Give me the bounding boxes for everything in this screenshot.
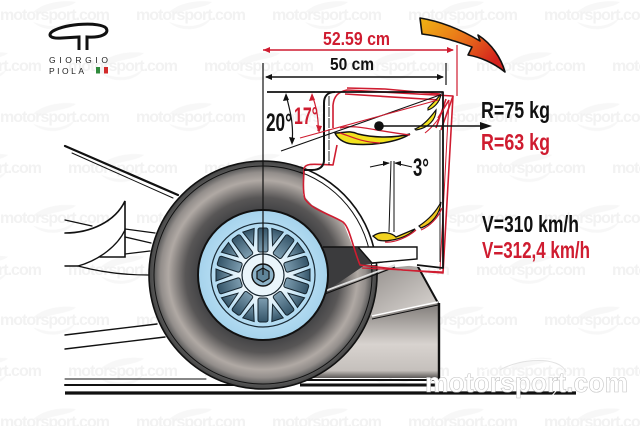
rear wing endplate interior: [303, 92, 453, 270]
car body outline left of the wheel: [65, 146, 576, 393]
beam wing wedge: [323, 247, 417, 294]
watermark pattern: motorsport.com: [340, 58, 450, 75]
watermark pattern: motorsport.com: [68, 58, 178, 75]
motorsport.com logo watermark: [425, 359, 628, 411]
angle: 20 degrees: 20°: [266, 109, 292, 137]
logo: Giorgio Piola: GIORGIO: [49, 55, 108, 65]
watermark pattern: motorsport.com: [272, 210, 382, 227]
watermark pattern: motorsport.com: [272, 7, 382, 24]
watermark pattern: motorsport.com: [340, 363, 450, 380]
watermark pattern: motorsport.com: [272, 312, 382, 329]
drag values: R=63 kg: [481, 129, 550, 155]
watermark pattern: motorsport.com: [68, 363, 178, 380]
black endplate outline (original wing): [267, 92, 443, 268]
watermark pattern: motorsport.com: [476, 262, 586, 279]
wheel rim: [198, 210, 328, 340]
watermark pattern: motorsport.com: [136, 7, 246, 24]
angle: 17 degrees: 17°: [294, 103, 318, 130]
watermark pattern: motorsport.com: [0, 312, 110, 329]
watermark pattern: motorsport.com: [204, 58, 314, 75]
watermark pattern: motorsport.com: [476, 363, 586, 380]
angle: 17 degrees: [294, 93, 438, 138]
logo: Giorgio Piola: [49, 24, 108, 76]
downforce arrow with centre of pressure: [374, 121, 492, 131]
watermark pattern: motorsport.com: [0, 210, 110, 227]
watermark pattern: motorsport.com: [204, 160, 314, 177]
drag values: [481, 97, 550, 155]
dimension: 52.59 cm: 52.59 cm: [323, 28, 390, 49]
watermark pattern: motorsport.com: [272, 109, 382, 126]
motorsport.com logo watermark: motorsport.com: [425, 367, 628, 398]
dimension: 50 cm: [265, 54, 446, 85]
upper wing flaps: [335, 94, 445, 145]
speed values: V=312,4 km/h: [482, 237, 590, 263]
wheel hub: [242, 254, 284, 296]
logo: Giorgio Piola: PIOLA: [49, 66, 84, 76]
rear tyre: [149, 161, 377, 389]
angle: 3 degrees: [370, 154, 429, 232]
watermark pattern: motorsport.com: [136, 109, 246, 126]
angle: 3 degrees: 3°: [413, 154, 429, 182]
dimension: 52.59 cm: [263, 28, 457, 96]
direction arrow: [420, 18, 505, 72]
watermark pattern: motorsport.com: [0, 7, 110, 24]
watermark pattern: motorsport.com: [136, 210, 246, 227]
watermark pattern: motorsport.com: [68, 262, 178, 279]
watermark pattern: motorsport.com: [68, 160, 178, 177]
wheel centre line: [262, 63, 264, 275]
watermark pattern: motorsport.com: [476, 58, 586, 75]
tyre edge arcs over endplate: [300, 167, 377, 275]
lower wing flaps: [373, 202, 442, 242]
watermark pattern: motorsport.com: [408, 109, 518, 126]
rim slots: [216, 228, 310, 322]
watermark pattern: motorsport.com: [340, 262, 450, 279]
watermark pattern: motorsport.com: [204, 262, 314, 279]
drag values: R=75 kg: [481, 97, 550, 123]
watermark pattern: motorsport.com: [408, 312, 518, 329]
angle: 20 degrees: [266, 93, 440, 151]
watermark pattern: motorsport.com: [408, 210, 518, 227]
watermark pattern: motorsport.com: [476, 160, 586, 177]
speed values: [482, 211, 590, 263]
watermark pattern: motorsport.com: [136, 312, 246, 329]
watermark pattern: motorsport.com: [408, 7, 518, 24]
watermark pattern: motorsport.com: [340, 160, 450, 177]
speed values: V=310 km/h: [482, 211, 579, 237]
red endplate outline (revised wing): [303, 88, 453, 273]
watermark pattern: motorsport.com: [204, 363, 314, 380]
watermark pattern: motorsport.com: [0, 109, 110, 126]
diffuser and floor: [300, 265, 439, 385]
dimension: 50 cm: 50 cm: [330, 54, 374, 74]
